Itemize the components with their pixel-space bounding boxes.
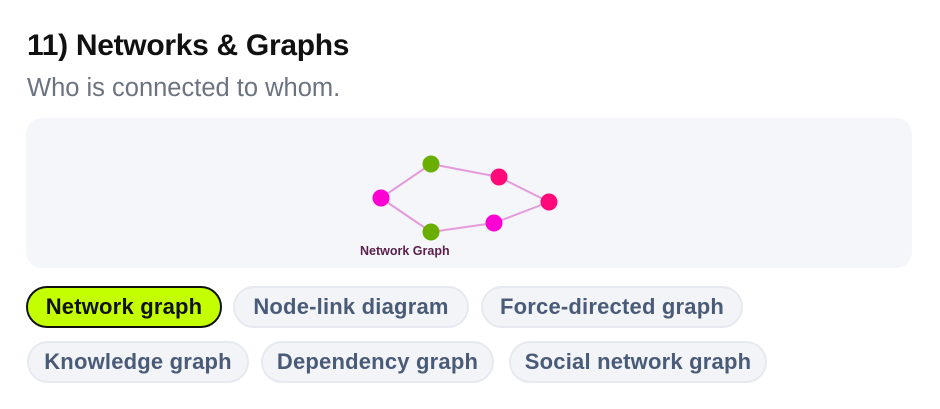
title: 11) Networks & Graphs (27, 29, 349, 62)
pill: Network graph: Network graph (46, 294, 202, 319)
pill: Social network graph: Social network graph (525, 349, 751, 374)
pill: Force-directed graph: Force-directed graph (500, 294, 724, 319)
pill: Node-link diagram (233, 286, 469, 328)
subtitle: Who is connected to whom. (27, 74, 340, 102)
pill: Social network graph (509, 341, 767, 383)
pill: Dependency graph (261, 341, 494, 383)
pill: Force-directed graph (481, 286, 743, 328)
network graph (360, 156, 558, 258)
network graph: Network Graph (360, 244, 450, 258)
pill: Node-link diagram: Node-link diagram (253, 294, 449, 319)
pill: Network graph (26, 286, 222, 328)
panel: chart (26, 118, 912, 268)
pill: Dependency graph: Dependency graph (277, 349, 478, 374)
pill: Knowledge graph: Knowledge graph (44, 349, 232, 374)
pill: Knowledge graph (27, 341, 249, 383)
